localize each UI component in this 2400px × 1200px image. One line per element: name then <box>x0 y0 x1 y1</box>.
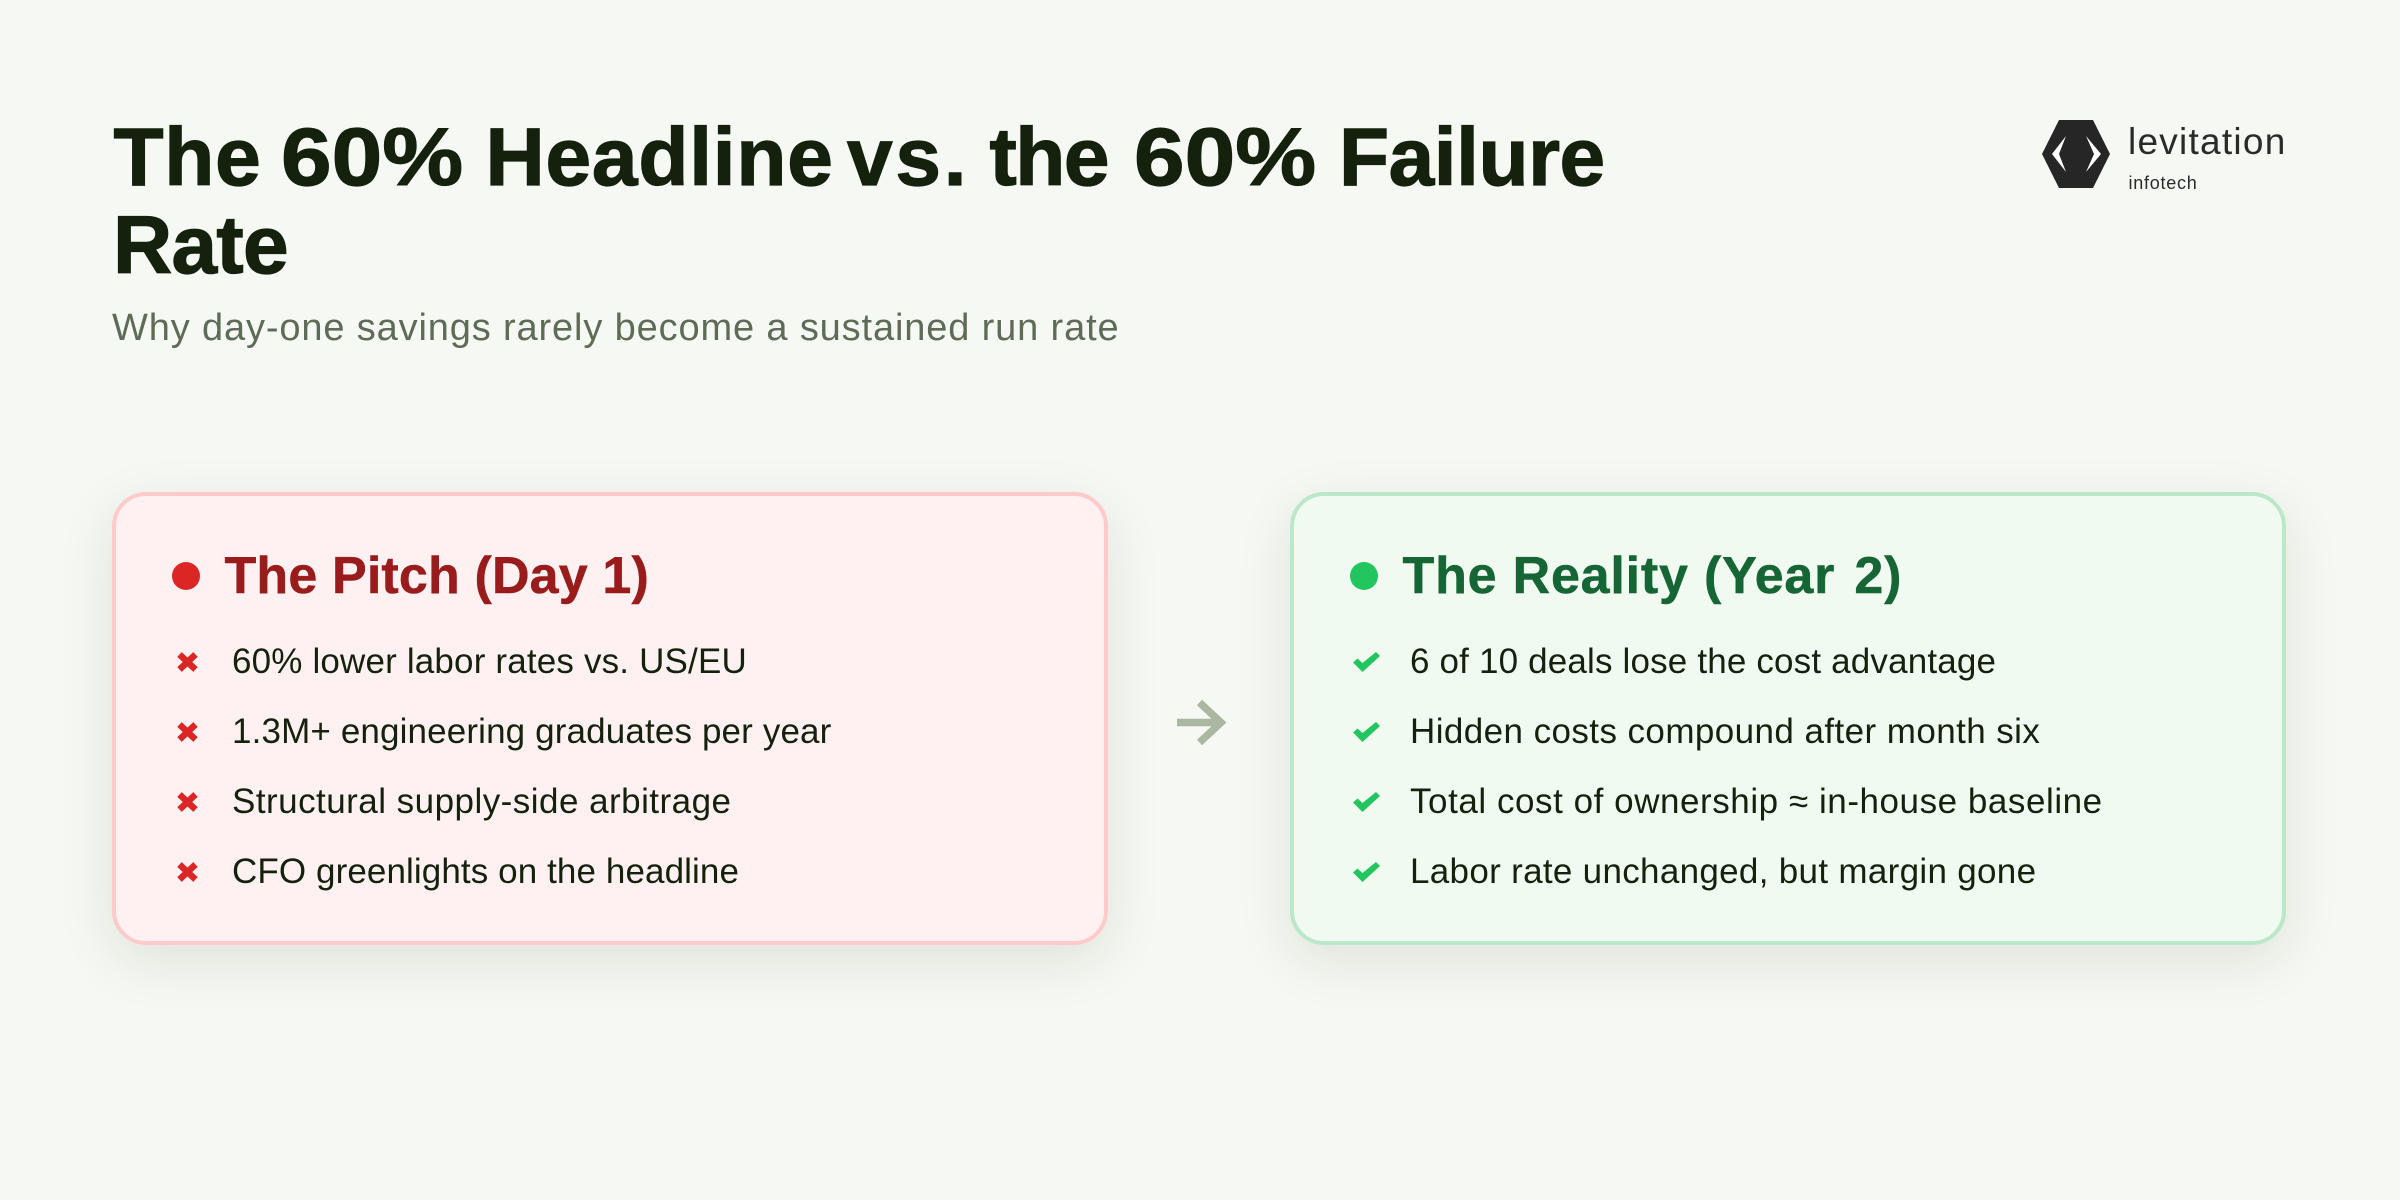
title: Failure <box>1339 112 1605 203</box>
pitch item 4 <box>177 852 739 891</box>
title <box>113 112 1605 291</box>
logo: levitation infotech <box>2042 120 2287 193</box>
title: the <box>990 112 1108 203</box>
reality heading: The Reality (Year 2) <box>1402 547 1902 605</box>
item text: CFO greenlights on the headline <box>232 852 739 891</box>
icon: check <box>1353 722 1380 742</box>
panel: the pitch <box>112 492 1108 945</box>
icon: cross <box>177 652 198 672</box>
item text: Total cost of ownership ≈ in-house baseline <box>1410 782 2103 821</box>
icon: hexagon logo mark <box>2042 120 2110 188</box>
title: 60% <box>1134 112 1316 203</box>
pitch heading: The Pitch (Day 1) <box>224 547 649 605</box>
logo tagline: infotech <box>2128 173 2198 193</box>
title: The <box>114 112 261 203</box>
reality item 2 <box>1353 712 2040 751</box>
pitch status dot <box>172 562 200 590</box>
pitch item 2 <box>177 712 831 751</box>
item text: Hidden costs compound after month six <box>1410 712 2040 751</box>
title: 60% <box>280 112 463 203</box>
icon: cross <box>177 862 198 882</box>
item text: 60% lower labor rates vs. US/EU <box>232 642 747 681</box>
item text: Structural supply-side arbitrage <box>232 782 731 821</box>
icon: check <box>1353 652 1380 672</box>
item text: 1.3M+ engineering graduates per year <box>232 712 831 751</box>
reality item 3 <box>1353 782 2103 821</box>
pitch item 1 <box>177 642 747 681</box>
icon: cross <box>177 722 198 742</box>
item text: 6 of 10 deals lose the cost advantage <box>1410 642 1996 681</box>
reality status dot <box>1350 562 1378 590</box>
icon: check <box>1353 792 1380 812</box>
logo wordmark: levitation <box>2128 121 2287 162</box>
reality item 1 <box>1353 642 1996 681</box>
icon: check <box>1353 862 1380 882</box>
panel: the reality <box>1290 492 2286 945</box>
item text: Labor rate unchanged, but margin gone <box>1410 852 2036 891</box>
title: vs. <box>847 112 969 203</box>
pitch item 3 <box>177 782 731 821</box>
title: Rate <box>113 200 288 291</box>
reality item 4 <box>1353 852 2036 891</box>
arrow <box>1177 700 1226 746</box>
title: Headline <box>486 112 834 203</box>
icon: cross <box>177 792 198 812</box>
subtitle: Why day-one savings rarely become a sustained run rate <box>112 307 1119 349</box>
